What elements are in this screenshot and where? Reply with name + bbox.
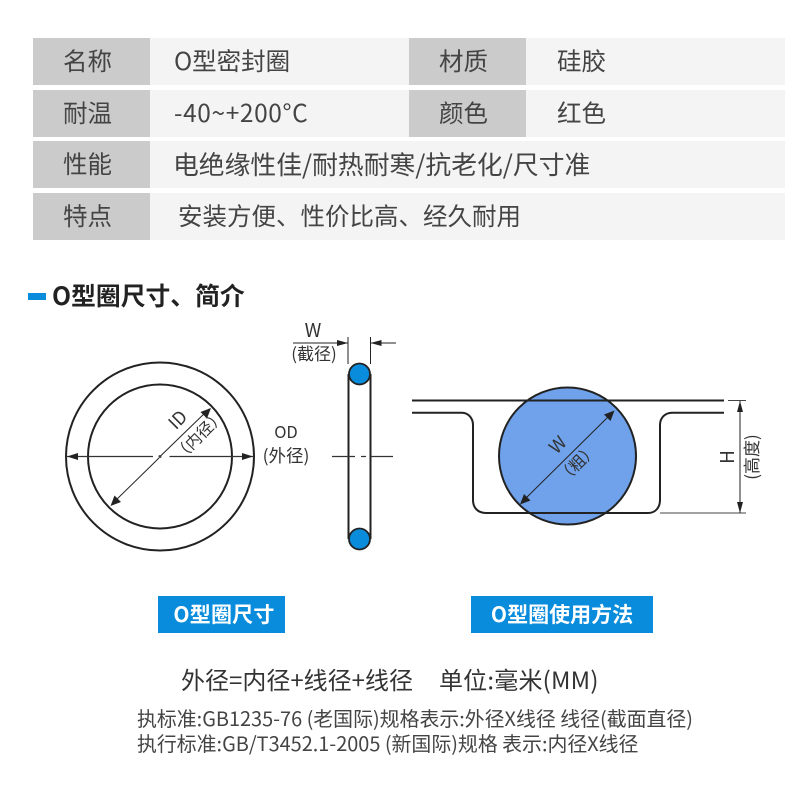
diagram: O-ring size	[66, 362, 309, 550]
label: OD: OD	[274, 419, 298, 443]
value: performance	[150, 141, 785, 188]
value: material	[526, 38, 785, 85]
value: colour	[526, 90, 785, 137]
button: O-ring size	[158, 596, 285, 633]
label: name	[33, 38, 150, 85]
label: name: 名称	[63, 43, 112, 78]
diagram: O-ring usage	[412, 388, 763, 524]
label: W thickness: W	[543, 429, 572, 459]
value: features	[150, 193, 785, 240]
button: O-ring size: O型圈尺寸	[173, 599, 275, 629]
value: performance: 电绝缘性佳/耐热耐寒/抗老化/尺寸准	[173, 145, 590, 182]
value: name: O型密封圈	[174, 43, 290, 78]
label: colour	[409, 90, 526, 137]
label: height: (高度)	[738, 434, 763, 480]
heading marker	[28, 293, 46, 300]
label: section diameter: (截径)	[291, 340, 337, 365]
standard note line 2: 执行标准:GB/T3452.1-2005 (新国际)规格 表示:内径X线径	[137, 728, 638, 757]
value: temperature	[150, 90, 409, 137]
value: material: 硅胶	[557, 43, 606, 78]
label: performance: 性能	[63, 146, 112, 181]
value: temperature: -40~+200°C	[174, 95, 308, 130]
heading: size intro	[28, 277, 245, 313]
button: O-ring usage	[471, 596, 653, 633]
button: O-ring usage: O型圈使用方法	[491, 599, 633, 629]
value: colour: 红色	[557, 95, 606, 130]
label: colour: 颜色	[439, 95, 488, 130]
value: features: 安装方便、性价比高、经久耐用	[178, 198, 521, 233]
label: material: 材质	[439, 43, 488, 78]
label: ID: ID	[162, 404, 193, 435]
label: inner diameter: （内径）	[167, 403, 229, 465]
label: material	[409, 38, 526, 85]
diagram: O-ring cross section	[291, 316, 396, 550]
panel: specification table	[33, 38, 785, 240]
heading text: O型圈尺寸、简介	[52, 277, 245, 313]
label: outer diameter: (外径)	[263, 443, 309, 468]
label: features	[33, 193, 150, 240]
value: name	[150, 38, 409, 85]
label: performance	[33, 141, 150, 188]
label: features: 特点	[63, 198, 112, 233]
label: temperature: 耐温	[63, 95, 112, 130]
label: W: W	[305, 316, 322, 343]
label: H: H	[713, 450, 740, 464]
label: temperature	[33, 90, 150, 137]
standard note line 1: 执标准:GB1235-76 (老国际)规格表示:外径X线径 线径(截面直径)	[137, 703, 693, 732]
formula and unit: 外径=内径+线径+线径 单位:毫米(MM)	[181, 661, 599, 696]
label: thick: （粗）	[551, 437, 602, 488]
